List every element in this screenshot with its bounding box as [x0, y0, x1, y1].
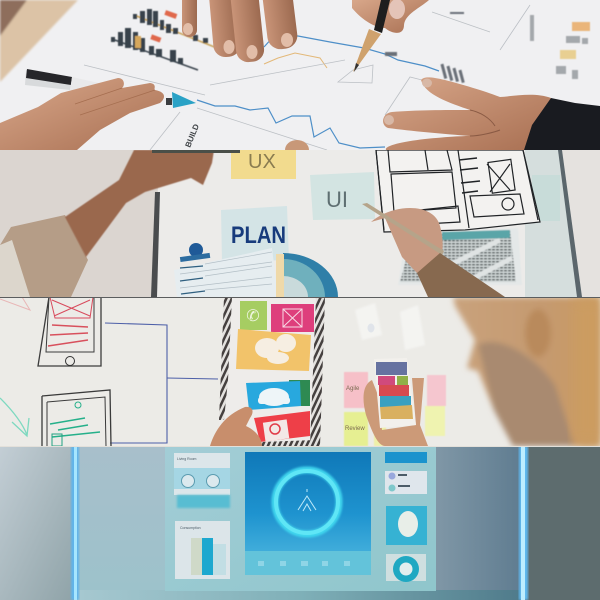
sticky note text: Agile [346, 386, 360, 392]
panel: team analysing charts on paper [0, 0, 600, 160]
connector lines [105, 323, 218, 443]
app tile: camera red [254, 411, 310, 442]
UI pale note with label: UI [326, 187, 348, 212]
whiteboard background [0, 297, 600, 446]
card: bar chart: Consumption [180, 526, 201, 530]
app tile: cloud blue [246, 380, 310, 410]
pale note right [532, 175, 560, 221]
app sheet with hatched frame [218, 297, 325, 446]
sketch: red phone wireframe [38, 297, 101, 366]
neon strip right [519, 446, 528, 600]
bar chart: lower [111, 28, 198, 70]
card: two dials: Living Room [177, 457, 197, 461]
faint white shapes [355, 303, 425, 350]
wireframe sketch sheet [376, 150, 540, 232]
sticky note text: Review [345, 426, 365, 432]
dark tick cluster [385, 12, 465, 83]
line chart: orange [264, 53, 327, 68]
backdrop centre left [74, 446, 174, 600]
hand holding sheet [210, 407, 262, 446]
app tile: chat orange [236, 329, 311, 371]
pale blue right strip [525, 150, 578, 297]
pen at top [152, 150, 240, 153]
PLAN note with label [221, 206, 289, 262]
arm and hand top [65, 150, 214, 257]
UI pale note with label [310, 172, 375, 220]
hand: top right holding pencil [352, 0, 429, 33]
stylus [362, 203, 444, 255]
clipboard note [180, 243, 274, 295]
hand: top fingers [182, 0, 299, 63]
hand: bottom left [0, 78, 164, 150]
blurred hair and shoulder [575, 297, 600, 446]
hand holding phone [364, 378, 428, 446]
panel: UX UI planning board [0, 150, 600, 297]
backdrop centre right [430, 446, 522, 600]
white cuff [0, 240, 30, 297]
teal glow bar [177, 495, 230, 508]
glowing ring icon [275, 470, 339, 534]
backdrop left [0, 446, 74, 600]
board frame left [151, 192, 160, 297]
UX yellow note with label [231, 150, 296, 179]
dark upper edge [0, 296, 600, 298]
right card: device dial [386, 506, 427, 545]
orange sticky notes on paper [530, 15, 590, 79]
paper background [0, 0, 600, 150]
right bar: blue [385, 452, 427, 463]
fingertips at bottom [285, 140, 309, 150]
app tile: mail pink [271, 304, 314, 332]
pencil [353, 0, 390, 72]
man's head blurred [453, 297, 600, 446]
main blue screen [245, 452, 371, 575]
line chart: blue top [264, 36, 439, 71]
beige sleeve left [0, 215, 88, 297]
sticky notes pink and lime [344, 372, 446, 446]
panel: glass smart-interface dashboard [0, 446, 600, 600]
app tile: phone green: ✆ [246, 308, 260, 325]
board frame right [558, 150, 582, 297]
sketch green arrow [0, 398, 29, 436]
card: bar chart [175, 521, 230, 579]
small chart marks and frames [84, 5, 530, 150]
donut chart [276, 253, 338, 297]
backdrop right [524, 446, 600, 600]
top edge line [0, 446, 600, 447]
blue push pin [368, 324, 374, 332]
PLAN note with label: PLAN [231, 222, 286, 249]
board [157, 150, 525, 297]
hand holding stylus [371, 208, 443, 273]
black sleeve [524, 98, 600, 150]
bar chart: upper [133, 9, 222, 50]
lower backdrop glow [78, 590, 523, 600]
UX yellow note with label: UX [248, 151, 276, 173]
glass panel [165, 446, 436, 591]
sketch: green phone wireframe [42, 390, 111, 446]
printed label: BUILD [184, 123, 201, 149]
panel: whiteboard with app sketches and phone [0, 296, 600, 446]
wooden desk corner [0, 0, 78, 82]
line chart: blue bottom [197, 100, 385, 148]
brown sleeve right [417, 253, 505, 297]
right card: two contacts [385, 471, 427, 494]
sticky note text [345, 386, 365, 432]
right card: round button [386, 554, 426, 582]
card: two dials [174, 453, 230, 495]
wall background [0, 150, 158, 297]
marker pen [25, 69, 196, 108]
app tile: phone green [240, 301, 267, 330]
smartphone with colourful app [374, 358, 416, 428]
neon strip left [71, 446, 79, 600]
colourful data sheet [400, 229, 517, 283]
hand: bottom right [383, 77, 551, 150]
sketch arrow red [0, 297, 30, 310]
